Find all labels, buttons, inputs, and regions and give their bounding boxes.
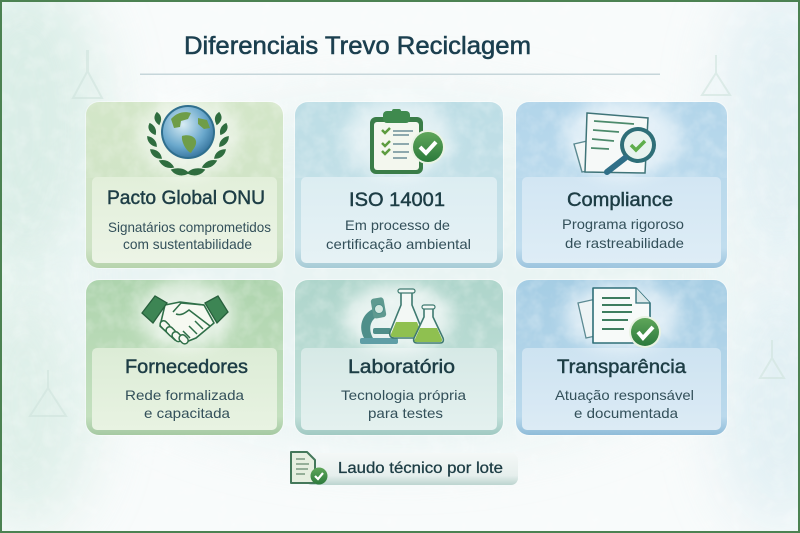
description line 2: para testes <box>368 405 443 421</box>
panel: Pacto Global ONU <box>85 97 284 269</box>
heading: Pacto Global ONU <box>107 188 265 209</box>
title divider <box>140 74 660 75</box>
panel: Fornecedores <box>85 279 284 436</box>
panel: Transparência <box>515 279 728 436</box>
title: Diferenciais Trevo Reciclagem <box>184 32 531 60</box>
heading: Compliance <box>567 190 673 211</box>
heading: Fornecedores <box>125 357 248 378</box>
callout: Laudo técnico por lote <box>291 452 518 485</box>
heading: Laboratório <box>348 357 455 378</box>
icon: globe with laurel <box>148 105 228 175</box>
heading: Transparência <box>557 357 686 378</box>
icon: document with check <box>578 288 661 348</box>
decorative faint flasks <box>30 50 784 416</box>
icon: handshake <box>142 296 228 345</box>
description: Rede formalizada <box>125 387 244 403</box>
description: Tecnologia própria <box>341 387 466 403</box>
panel: Compliance <box>515 98 728 269</box>
description line 2: certificação ambiental <box>326 236 471 252</box>
heading: ISO 14001 <box>349 190 445 211</box>
description line 2: e documentada <box>574 405 678 421</box>
icon: report with check <box>291 452 328 484</box>
description: Atuação responsável <box>555 387 694 403</box>
description line 2: e capacitada <box>144 405 230 421</box>
callout label: Laudo técnico por lote <box>338 460 503 477</box>
description line 2: de rastreabilidade <box>565 235 684 251</box>
description: Em processo de <box>345 217 450 233</box>
icon: clipboard with check <box>370 109 445 174</box>
panel: ISO 14001 <box>294 98 504 269</box>
icon: documents with magnifier <box>574 113 656 173</box>
icon: microscope and flasks <box>360 289 443 344</box>
description: Signatários comprometidos <box>108 219 271 235</box>
description: Programa rigoroso <box>562 216 684 232</box>
description line 2: com sustentabilidade <box>123 236 252 252</box>
panel: Laboratório <box>294 279 504 436</box>
